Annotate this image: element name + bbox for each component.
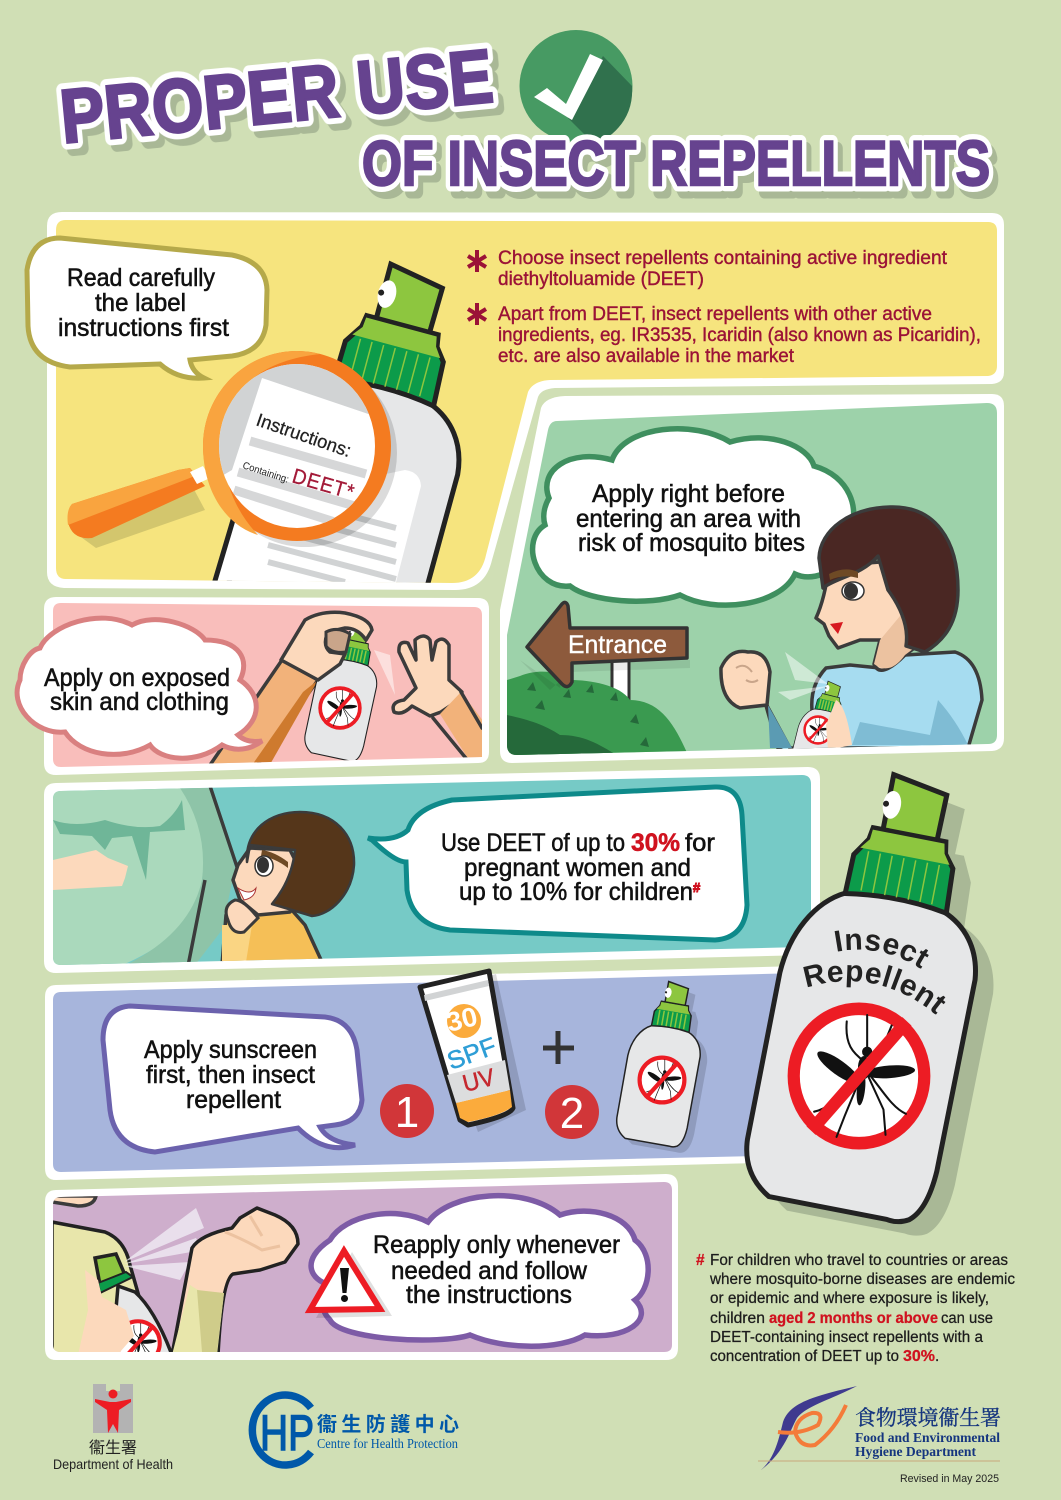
footnote: concentration of DEET up to (710, 1348, 899, 1365)
icon: sunscreen tube: 30 (443, 1001, 481, 1038)
bubble: exposed skin: skin and clothing (50, 688, 229, 716)
text block: choosing repellents: ingredients, eg. IR3535, Icaridin (also known as Picaridin), (498, 324, 981, 346)
icon: sunscreen tube: UV (460, 1064, 498, 1098)
illustration: entrance sign and bush (507, 602, 690, 760)
panel: apply before risk area (500, 394, 1004, 790)
illustration: pregnant mother and girl (53, 786, 354, 968)
icon: number 1: 1 (395, 1088, 419, 1137)
bubble: read carefully: Read carefully (67, 264, 215, 292)
icon: small repellent bottle (614, 977, 719, 1155)
text block: choosing repellents: Apart from DEET, insect repellents with other active (498, 303, 932, 325)
illustration: woman spraying wrist (719, 505, 984, 749)
illustration: spraying arm (208, 612, 490, 768)
footnote: For children who travel to countries or areas (710, 1252, 1008, 1269)
logo: Centre for Health Protection: HP (260, 1405, 314, 1461)
text block: choosing repellents: etc. are also available in the market (498, 345, 795, 367)
icon: number 1 (380, 1084, 434, 1138)
illustration: reapplying on wrist (52, 1196, 298, 1365)
bubble: DEET percentage: Use DEET of up to (441, 829, 625, 857)
logo: Department of Health (53, 1384, 173, 1472)
revision note: Revised in May 2025 (900, 1473, 999, 1485)
footnote (696, 1252, 1015, 1365)
title (56, 34, 990, 199)
bubble: DEET percentage: 30% (631, 829, 680, 857)
small bottle (792, 680, 842, 749)
logo: Department of Health: 衞生署 (89, 1439, 137, 1457)
bubble: reapply: Reapply only whenever (373, 1231, 620, 1259)
logo: Centre for Health Protection: 衞生防護中心 (317, 1413, 459, 1436)
footnote: children (710, 1310, 765, 1327)
icon: large insect repellent bottle: Repellent (803, 964, 946, 1014)
spray mist (778, 652, 828, 700)
title: PROPER USE (56, 34, 497, 160)
bubble: read carefully: the label (95, 289, 186, 317)
footnote: aged 2 months or above (769, 1310, 938, 1327)
bubble: DEET percentage (368, 787, 747, 940)
girl hand (226, 900, 258, 932)
bubble: apply right before: Apply right before (592, 480, 785, 508)
icon: plus (543, 1031, 574, 1064)
girl head (231, 846, 294, 917)
bottle label (836, 950, 930, 975)
icon: asterisk (468, 250, 486, 272)
panel: read the label (24, 212, 1004, 590)
logo: Food and Environmental Hygiene Department: Food and Environmental (855, 1430, 1000, 1445)
bubble: apply right before (533, 429, 854, 605)
footnote: DEET-containing insect repellents with a (710, 1329, 983, 1346)
bubble: apply sunscreen: repellent (186, 1086, 281, 1114)
sweater (765, 652, 982, 760)
bubble: reapply: needed and follow (391, 1257, 588, 1285)
illustration: spray bottle with magnifier (68, 260, 462, 583)
holding hand and arm (721, 651, 770, 708)
icon: sunscreen tube (420, 971, 526, 1132)
footnote: . (935, 1348, 939, 1365)
hair (819, 507, 958, 652)
mother dress (53, 788, 204, 968)
face (816, 560, 925, 670)
girl body (220, 912, 322, 962)
no mosquito sign (794, 1009, 924, 1143)
icon: warning triangle (310, 1251, 392, 1318)
bubble: DEET percentage: up to 10% for children (459, 878, 693, 906)
text block: choosing repellents: Choose insect repellents containing active ingredient (498, 247, 948, 269)
bubble: reapply (310, 1196, 648, 1346)
magnifier lens (203, 351, 391, 541)
bubble: apply right before: risk of mosquito bites (578, 529, 805, 557)
bubble: read carefully (27, 238, 267, 378)
bubble: reapply: the instructions (406, 1281, 572, 1309)
footnote: can use (941, 1310, 993, 1327)
footnote: where mosquito-borne diseases are endemic (709, 1271, 1015, 1288)
panel: pregnant women and children (44, 767, 820, 973)
holding hand (78, 1270, 134, 1355)
panel: reapply (45, 1174, 678, 1365)
bubble: exposed skin (17, 618, 262, 758)
bubble: apply sunscreen (103, 1006, 362, 1152)
spray mist (124, 1208, 204, 1280)
logo: Centre for Health Protection (252, 1395, 459, 1465)
mother hand (53, 850, 128, 890)
icon: number 2: 2 (560, 1089, 584, 1138)
logo: Centre for Health Protection: Centre for Health Protection (317, 1436, 458, 1451)
illustration: spray bottle with magnifier: Containing: (241, 460, 290, 486)
footnote: 30% (903, 1348, 935, 1365)
text block: choosing repellents: diethyltoluamide (DEET) (498, 268, 704, 290)
bubble: apply sunscreen: first, then insect (146, 1061, 315, 1089)
illustration: spray bottle with magnifier: DEET* (290, 465, 357, 504)
logo: Food and Environmental Hygiene Department: Hygiene Department (855, 1444, 976, 1459)
icon: green check circle (520, 30, 632, 142)
bubble: read carefully: instructions first (58, 314, 229, 342)
text block: choosing repellents (468, 247, 981, 367)
magnifier handle (68, 468, 205, 538)
icon: number 2 (545, 1085, 599, 1139)
panel: apply on exposed skin (17, 597, 490, 775)
footnote: or epidemic and where exposure is likely, (710, 1290, 989, 1307)
logo: Food and Environmental Hygiene Department: 食物環境衞生署 (855, 1402, 1001, 1432)
icon: sunscreen tube: SPF (443, 1032, 500, 1076)
bubble: DEET percentage: for (685, 829, 715, 857)
illustration: spray bottle with magnifier: Instructions: (254, 409, 354, 461)
label paper (213, 470, 421, 590)
icon: large insect repellent bottle (744, 771, 994, 1236)
bubble: apply right before: entering an area with (576, 505, 801, 533)
bubble: DEET percentage: # (693, 880, 701, 895)
panel: sunscreen then repellent (45, 966, 800, 1180)
icon: large insect repellent bottle: Insect (834, 930, 929, 969)
raised arm (172, 1208, 298, 1355)
bubble: exposed skin: Apply on exposed (44, 664, 230, 692)
magnifier shadow (81, 491, 205, 548)
logo: Food and Environmental Hygiene Department (758, 1386, 1001, 1470)
logo: Department of Health: Department of Health (53, 1456, 173, 1472)
bubble: apply sunscreen: Apply sunscreen (144, 1036, 317, 1064)
bubble: DEET percentage: pregnant women and (464, 854, 691, 882)
bottle (112, 1286, 172, 1355)
footnote: # (696, 1252, 705, 1269)
illustration: entrance sign and bush: Entrance (568, 631, 667, 659)
title: PROPER USE (56, 34, 497, 160)
